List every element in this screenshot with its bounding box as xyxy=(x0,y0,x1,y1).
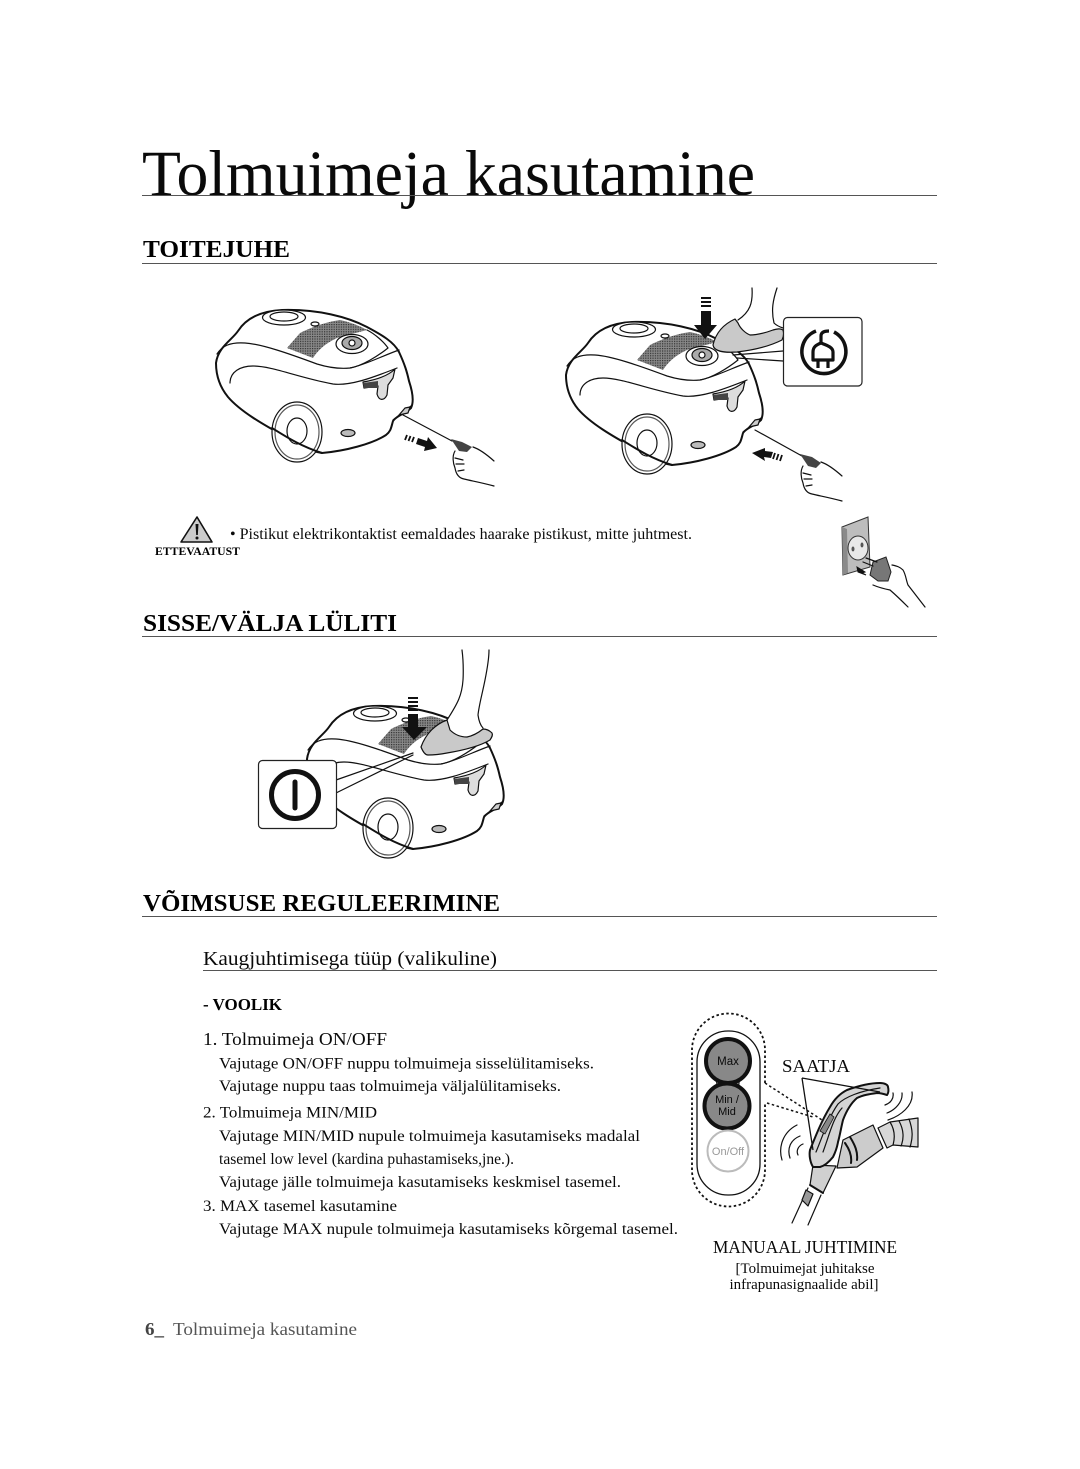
handle xyxy=(810,1083,888,1167)
arrow: pull cord out xyxy=(405,435,437,451)
hose xyxy=(878,1118,918,1148)
instructions text block: 2. Tolmuimeja MIN/MID xyxy=(203,1104,377,1122)
note: infrared xyxy=(730,1261,878,1293)
instructions text block: 3. MAX tasemel kasutamine xyxy=(203,1198,397,1215)
icon: cord rewind plug xyxy=(733,318,862,386)
subheading: remote type: Kaugjuhtimisega tüüp (valikuline) xyxy=(203,948,497,970)
caution text: • Pistikut elektrikontaktist eemaldades haarake pistikust, mitte juhtmest. xyxy=(230,526,692,543)
illustration: vacuum with cord pulled out xyxy=(216,310,494,486)
instructions text block: Vajutage nuppu taas tolmuimeja väljalülitamiseks. xyxy=(219,1078,561,1095)
heading: Võimsuse reguleerimine: VÕIMSUSE REGULEERIMINE xyxy=(143,888,500,917)
instructions text block: Vajutage MAX nupule tolmuimeja kasutamiseks kõrgemal tasemel. xyxy=(219,1221,678,1238)
collar xyxy=(837,1125,883,1168)
label: hose: - VOOLIK xyxy=(203,995,282,1014)
button: Max xyxy=(706,1039,750,1083)
instructions text block xyxy=(203,1029,678,1238)
foot xyxy=(713,288,784,352)
foot xyxy=(421,650,492,755)
lower tube xyxy=(810,1165,836,1193)
note: infrared: [Tolmuimejat juhitakse xyxy=(736,1261,874,1277)
note: infrared: infrapunasignaalide abil] xyxy=(730,1277,878,1293)
title: Tolmuimeja kasutamine xyxy=(142,138,755,210)
label: manual control: MANUAAL JUHTIMINE xyxy=(713,1237,897,1257)
instructions text block: Vajutage jälle tolmuimeja kasutamiseks keskmisel tasemel. xyxy=(219,1174,621,1191)
button: On/Off xyxy=(708,1130,748,1172)
instructions text block: Vajutage MIN/MID nupule tolmuimeja kasutamiseks madalal xyxy=(219,1128,641,1145)
button: Max: Max xyxy=(717,1056,739,1068)
button: Min/Mid xyxy=(704,1084,750,1128)
heading: Toitejuhe: TOITEJUHE xyxy=(143,236,290,263)
arrow: cord return xyxy=(752,448,782,461)
illustration: foot pressing power pedal xyxy=(258,650,504,858)
arrow: press down xyxy=(694,298,717,339)
label: sender: SAATJA xyxy=(782,1056,850,1076)
instructions text block: 1. Tolmuimeja ON/OFF xyxy=(203,1029,387,1049)
illustration: hose handle with sender xyxy=(781,1078,918,1225)
remote control panel xyxy=(692,1013,822,1206)
button: Min/Mid: Mid xyxy=(718,1106,736,1118)
illustration: unplugging from wall socket xyxy=(842,517,925,607)
instructions text block: tasemel low level (kardina puhastamiseks,jne.). xyxy=(219,1151,514,1168)
heading: Sisse/Välja lüliti: SISSE/VÄLJA LÜLITI xyxy=(143,610,397,637)
instructions text block: Vajutage ON/OFF nuppu tolmuimeja sisselülitamiseks. xyxy=(219,1056,594,1072)
button: On/Off: On/Off xyxy=(712,1146,745,1158)
button: Min/Mid: Min / xyxy=(715,1094,740,1106)
caution label: ETTEVAATUST xyxy=(155,546,240,558)
signal waves xyxy=(781,1092,912,1160)
page footer: Tolmuimeja kasutamine xyxy=(173,1319,357,1339)
page footer: 6_ xyxy=(145,1319,165,1339)
icon: power button xyxy=(258,753,413,828)
icon: warning triangle xyxy=(181,517,212,542)
caution note xyxy=(155,517,692,558)
arrow: press down xyxy=(402,698,427,740)
illustration: foot pressing cord rewind pedal xyxy=(566,288,862,501)
